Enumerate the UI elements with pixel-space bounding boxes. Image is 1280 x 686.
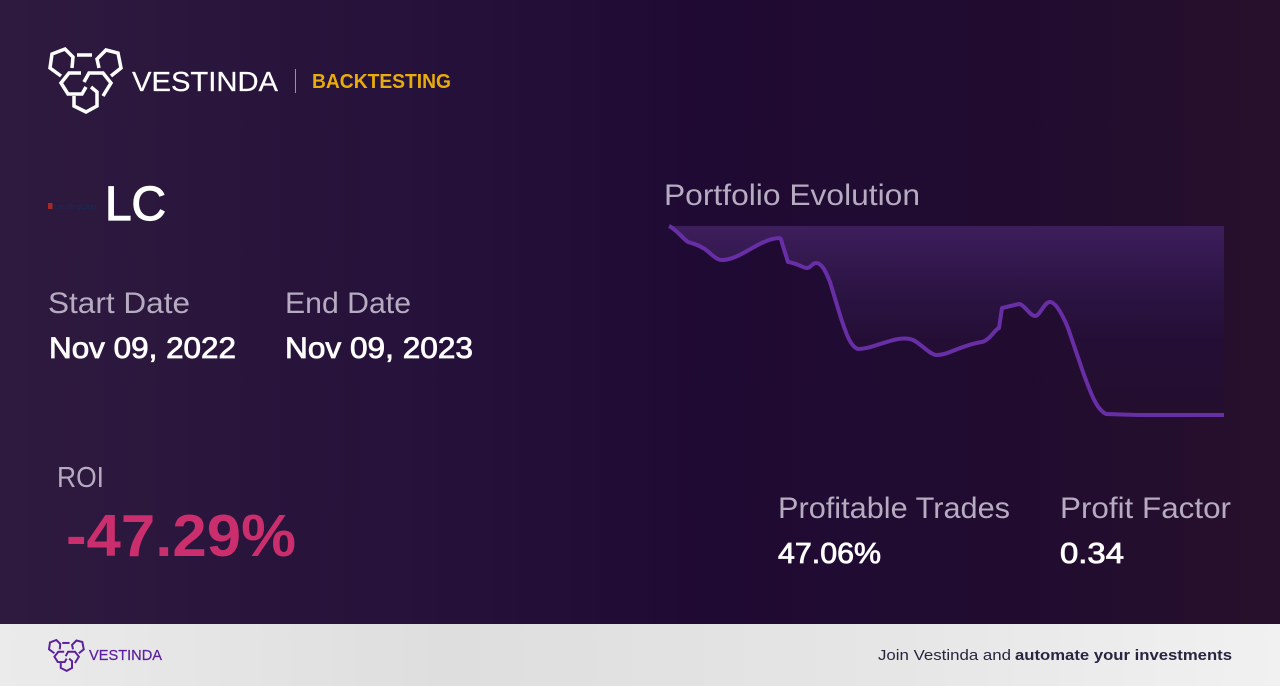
icon: company logo: LendingClub — [54, 202, 96, 211]
ROI: -47.29% — [66, 503, 296, 569]
profit factor: 0.34 — [1060, 538, 1124, 570]
wordmark: VESTINDA — [132, 66, 278, 97]
end date — [285, 287, 473, 365]
profitable trades — [778, 492, 1010, 570]
chart heading: Portfolio Evolution — [664, 179, 920, 212]
icon: vestinda hexagons — [50, 49, 121, 112]
ticker heading — [48, 178, 166, 231]
start date: Start Date — [48, 287, 190, 320]
divider — [295, 69, 296, 93]
end date: End Date — [285, 287, 411, 320]
footer logo — [49, 640, 162, 671]
profitable trades: 47.06% — [778, 538, 881, 570]
area fill — [669, 226, 1224, 415]
ROI: ROI — [57, 462, 104, 494]
footer — [0, 624, 1280, 686]
end date: Nov 09, 2023 — [285, 332, 473, 365]
line — [669, 226, 1224, 415]
start date — [48, 287, 236, 365]
ticker: LC — [105, 178, 166, 231]
call to action: Join Vestinda and — [878, 647, 1011, 664]
call to action — [878, 647, 1232, 664]
line chart: portfolio evolution — [669, 226, 1224, 415]
profit factor — [1060, 492, 1231, 570]
ROI — [57, 462, 296, 569]
icon: vestinda hexagons small — [49, 640, 84, 671]
call to action: automate your investments — [1015, 647, 1232, 664]
profitable trades: Profitable Trades — [778, 492, 1010, 525]
start date: Nov 09, 2022 — [49, 332, 236, 365]
profit factor: Profit Factor — [1060, 492, 1231, 525]
section label: BACKTESTING — [312, 71, 451, 93]
header logo — [50, 49, 278, 112]
footer wordmark: VESTINDA — [89, 647, 162, 664]
